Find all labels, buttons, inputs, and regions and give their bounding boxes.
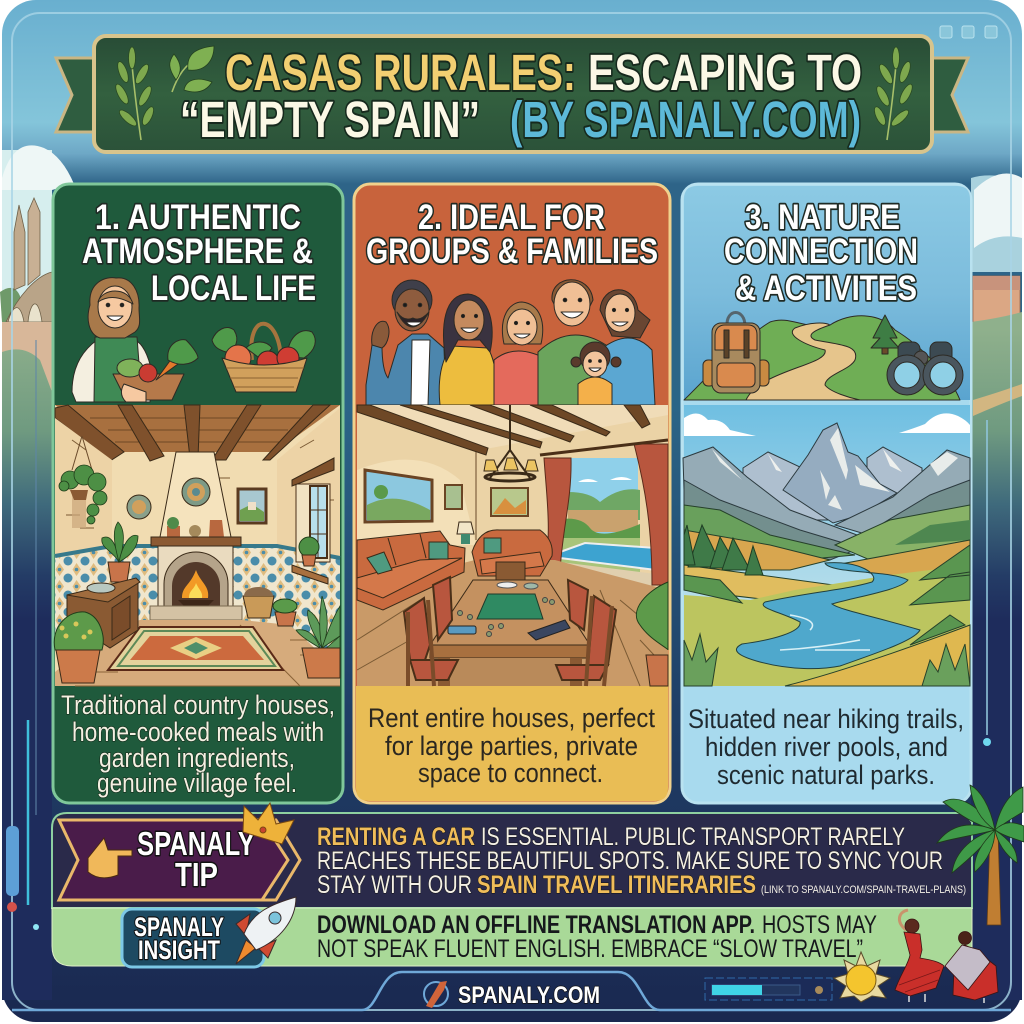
illustration: rustic living room with fireplace — [54, 405, 340, 686]
icon: spanaly logo — [424, 981, 448, 1008]
banner plate — [94, 36, 932, 152]
panel 1 text: garden ingredients, — [99, 743, 295, 773]
spanaly tip badge — [59, 820, 300, 900]
right mountain — [835, 450, 970, 540]
offline translation text — [317, 911, 877, 963]
title line 2: “EMPTY SPAIN” — [180, 91, 480, 148]
footer website: SPANALY.COM — [458, 982, 600, 1009]
illustration: family living room with pool view — [357, 405, 668, 686]
woman in yellow — [439, 294, 496, 405]
panel 2 text: Rent entire houses, perfect — [368, 703, 656, 733]
tips panel dark block — [52, 813, 972, 908]
cabinet — [67, 580, 138, 648]
spanaly tip badge: SPANALY — [137, 825, 255, 862]
icon: crown — [243, 803, 294, 844]
side walls — [55, 418, 112, 556]
chairs — [404, 577, 616, 686]
side indicators — [6, 738, 991, 930]
grass tufts — [684, 634, 970, 686]
lamp — [457, 522, 474, 534]
panel 1 card — [53, 184, 343, 803]
mantel items — [167, 526, 180, 537]
icon: backpack — [703, 312, 769, 393]
panel 2 text: space to connect. — [418, 758, 603, 788]
title banner — [56, 36, 968, 152]
wood floor — [357, 560, 668, 686]
fireplace — [158, 546, 233, 606]
chimney hood — [160, 452, 231, 537]
panel 1: authentic atmosphere — [53, 184, 343, 803]
left sofa — [357, 531, 465, 610]
castle — [973, 276, 1020, 322]
insight light band — [52, 908, 972, 966]
panel 3 header fill — [684, 186, 970, 400]
icon: flamenco dancers — [895, 910, 998, 1003]
right hills — [971, 312, 1022, 1000]
renting a car text: RENTING A CAR — [317, 823, 475, 851]
window view — [568, 458, 638, 586]
panel 1 text: genuine village feel. — [97, 768, 297, 798]
background scenery left — [0, 145, 74, 1000]
illustration: trail hills — [684, 315, 960, 400]
pine trees — [684, 525, 763, 575]
dining table — [496, 562, 525, 582]
window — [296, 484, 330, 562]
illustration: vegetable basket — [212, 324, 315, 392]
offline translation text: HOSTS MAY — [762, 911, 877, 939]
wood ceiling — [55, 405, 340, 452]
renting a car text: SPAIN TRAVEL ITINERARIES — [477, 871, 756, 899]
progress widget — [705, 978, 832, 1000]
ceiling — [357, 405, 668, 450]
fronds — [937, 785, 1024, 873]
panel 1 text: home-cooked meals with — [72, 717, 324, 747]
central peak — [783, 423, 897, 523]
spiky plant in pot — [296, 596, 340, 650]
panel 3 heading — [724, 198, 918, 308]
window buttons — [940, 26, 997, 38]
illustration: host woman with vegetables — [72, 278, 198, 402]
right sofa — [472, 530, 552, 576]
footer tab — [12, 972, 1011, 1010]
board game — [477, 594, 543, 619]
panel 1 heading: 1. AUTHENTIC — [95, 198, 301, 237]
renting a car text: (LINK TO SPANALY.COM/SPAIN-TRAVEL-PLANS) — [761, 884, 966, 896]
spanaly insight badge: SPANALY — [134, 912, 224, 942]
panel 2 bottom fill — [356, 686, 668, 801]
panel 3 heading: & ACTIVITES — [735, 269, 917, 308]
panel 3 text: scenic natural parks. — [717, 760, 935, 790]
basket and small pot — [243, 596, 274, 618]
panel 3 card — [682, 184, 971, 803]
renting a car text: STAY WITH OUR — [317, 871, 472, 899]
icon: sun — [834, 952, 890, 1002]
golden meadows — [684, 530, 830, 570]
sprig icon — [170, 46, 214, 92]
panel 2 heading: GROUPS & FAMILIES — [366, 232, 658, 271]
panel 3: nature connection — [682, 184, 971, 803]
spanaly tip badge: TIP — [175, 856, 218, 893]
title line 1: CASAS RURALES: — [225, 44, 576, 101]
panel 3 text: hidden river pools, and — [705, 732, 948, 762]
panel 3 text — [688, 704, 964, 790]
panel 1 heading: LOCAL LIFE — [151, 269, 316, 308]
panel 3 text: Situated near hiking trails, — [688, 704, 964, 734]
panel 1 heading: ATMOSPHERE & — [82, 232, 313, 271]
river — [736, 563, 920, 669]
panel 2: groups and families — [354, 184, 670, 803]
left sky — [2, 150, 52, 330]
panel 2 text: for large parties, private — [385, 731, 638, 761]
trunk — [987, 832, 1001, 925]
renting a car text: IS ESSENTIAL. PUBLIC TRANSPORT RARELY — [481, 823, 905, 851]
child — [571, 342, 621, 405]
floor — [55, 620, 340, 686]
wall divider — [475, 452, 477, 540]
bushes right — [910, 545, 970, 645]
shrub in pot — [54, 612, 103, 650]
laurel right — [872, 47, 915, 140]
panel 1 heading — [82, 198, 316, 308]
panel 2 card — [354, 184, 670, 803]
icon: pointing hand — [88, 838, 132, 878]
man with beard — [366, 280, 446, 405]
potted plant — [636, 582, 668, 650]
wall pictures — [365, 470, 528, 522]
potted plant on cabinet — [108, 562, 130, 582]
title line 1: ESCAPING TO — [588, 44, 862, 101]
left mountain — [683, 447, 857, 550]
red dancer — [895, 910, 944, 1002]
panel 2 text — [368, 703, 656, 788]
icon: palm tree — [937, 785, 1024, 925]
man in green — [538, 280, 610, 405]
back mountains — [743, 447, 922, 520]
hanging plant — [72, 436, 92, 470]
tips panel — [52, 803, 972, 967]
panel 3 heading: 3. NATURE — [745, 198, 900, 237]
woman in blue — [600, 290, 655, 405]
icon: rocket — [236, 897, 296, 964]
renting a car text — [317, 823, 966, 899]
panel 2 heading — [366, 198, 658, 271]
wall plates and picture — [182, 478, 210, 506]
lit wall patch — [357, 460, 476, 545]
second dancer — [945, 932, 998, 1003]
ribbon left — [56, 58, 98, 132]
spanaly insight badge: INSIGHT — [138, 935, 220, 965]
panel 3 heading: CONNECTION — [724, 232, 918, 271]
bridge and cathedral — [0, 288, 24, 322]
title line 2: (BY SPANALY.COM) — [510, 91, 861, 148]
ribbon right — [926, 58, 968, 132]
laurel left — [113, 47, 156, 140]
illustration: family group — [366, 280, 655, 405]
offline translation text: DOWNLOAD AN OFFLINE TRANSLATION APP. — [317, 911, 755, 939]
spanaly insight badge — [122, 909, 264, 967]
foreground meadow — [785, 625, 970, 686]
curtains — [544, 458, 571, 572]
background scenery right — [971, 174, 1022, 1000]
illustration: mountain valley and river — [683, 405, 970, 686]
offline translation text: NOT SPEAK FLUENT ENGLISH. EMBRACE “SLOW TRAVEL” — [317, 935, 863, 963]
green hills — [684, 505, 855, 560]
panel 1 text — [61, 690, 335, 798]
icon: binoculars — [887, 342, 963, 395]
tiled dado — [55, 546, 340, 650]
rug — [108, 627, 283, 670]
clouds — [684, 413, 756, 436]
title line 2 — [180, 91, 861, 148]
chandelier — [490, 405, 530, 478]
girl in red — [494, 302, 548, 405]
left cliff and hills — [2, 322, 52, 392]
panel 1 text: Traditional country houses, — [61, 690, 335, 720]
panel 2 heading: 2. IDEAL FOR — [418, 198, 605, 237]
